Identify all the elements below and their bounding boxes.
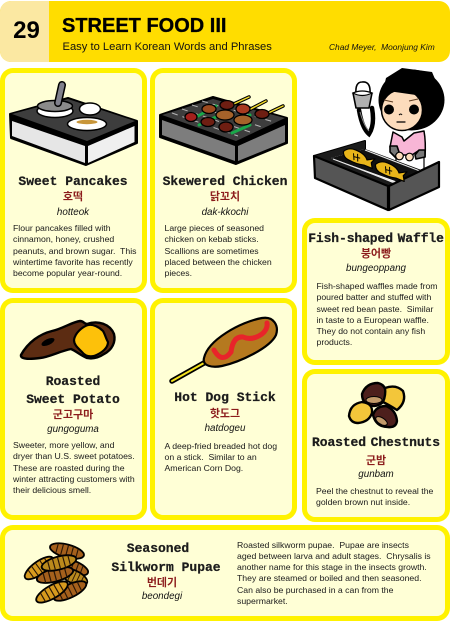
heading bbox=[26, 374, 120, 407]
description: Scallions are sometimes bbox=[164, 246, 259, 256]
heading: Roasted Chestnuts bbox=[312, 435, 440, 450]
description: become popular year-round. bbox=[13, 268, 122, 278]
description: on a stick. Similar to an bbox=[164, 452, 257, 462]
icon: griddle with pancakes bbox=[9, 81, 138, 166]
icon: corn dog bbox=[169, 316, 278, 384]
korean word: 군밤 bbox=[366, 455, 386, 467]
vendor figure bbox=[378, 68, 444, 172]
description: wintertime favorite has recently bbox=[13, 257, 133, 267]
panel: sweet pancakes bbox=[0, 68, 147, 293]
heading: Sweet Potato bbox=[26, 392, 120, 407]
korean word: 군고구마 bbox=[53, 409, 93, 421]
panel: fish-shaped waffle bbox=[302, 218, 450, 365]
description: Fish-shaped waffles made from bbox=[316, 281, 438, 291]
description: Peel the chestnut to reveal the bbox=[316, 486, 433, 496]
heading: Roasted bbox=[46, 374, 100, 389]
korean word: 핫도그 bbox=[210, 408, 240, 420]
description bbox=[13, 440, 135, 495]
romanization: dak-kkochi bbox=[202, 206, 248, 218]
icon: fish waffle right bbox=[373, 159, 408, 183]
waffle stand bbox=[314, 141, 439, 210]
icon: silkworm pupae pile bbox=[24, 542, 89, 604]
description bbox=[237, 540, 431, 606]
heading: Fish-shaped Waffle bbox=[308, 231, 444, 246]
description: their delicious smell. bbox=[13, 485, 91, 495]
description: A deep-fried breaded hot dog bbox=[164, 440, 277, 450]
description: aged between larva and adult stages. Chrysalis is bbox=[237, 551, 431, 561]
icon: hanging lamp bbox=[353, 82, 373, 134]
heading: Skewered Chicken bbox=[163, 174, 287, 189]
description: placed between the chicken bbox=[164, 257, 272, 267]
title: STREET FOOD III bbox=[62, 15, 226, 37]
icon: sweet potato bbox=[20, 320, 116, 360]
description: another name for this stage in the insects growth. bbox=[237, 562, 427, 572]
description bbox=[164, 440, 277, 473]
description: pieces. bbox=[164, 268, 192, 278]
romanization: hotteok bbox=[57, 206, 89, 218]
description: American Corn Dog. bbox=[164, 463, 243, 473]
description: poured batter and stuffed with bbox=[316, 292, 431, 302]
heading: Hot Dog Stick bbox=[174, 390, 276, 405]
description: winter attracting customers with bbox=[13, 474, 135, 484]
description: Sweeter, more yellow, and bbox=[13, 440, 114, 450]
panel: roasted chestnuts bbox=[302, 369, 450, 522]
description: peanuts, and brown sugar. This bbox=[13, 246, 136, 256]
panel: skewered chicken bbox=[150, 68, 297, 293]
romanization: gunbam bbox=[358, 469, 394, 480]
description bbox=[164, 223, 272, 278]
heading line 2: Silkworm Pupae bbox=[111, 560, 221, 574]
lesson number tab bbox=[0, 1, 49, 62]
description: in taste to a European waffle. bbox=[316, 315, 429, 325]
heading: Sweet Pancakes bbox=[18, 174, 128, 189]
description: chicken on kebab sticks. bbox=[164, 234, 259, 244]
subtitle: Easy to Learn Korean Words and Phrases bbox=[62, 41, 272, 53]
description: sweet red bean paste. Similar bbox=[316, 304, 433, 314]
korean word: 닭꼬치 bbox=[210, 191, 240, 203]
heading line 1: Seasoned bbox=[127, 541, 189, 556]
description: cinnamon, honey, crushed bbox=[13, 234, 114, 244]
description: These are roasted during the bbox=[13, 462, 125, 472]
description: Large pieces of seasoned bbox=[164, 223, 264, 233]
panel: seasoned silkworm pupae bbox=[0, 525, 450, 620]
panel: hot dog stick bbox=[150, 298, 297, 520]
icon: grill with skewers bbox=[159, 95, 288, 165]
romanization: beondegi bbox=[142, 591, 182, 602]
description: supermarket. bbox=[237, 596, 288, 606]
romanization: hatdogeu bbox=[205, 423, 245, 434]
korean word: 호떡 bbox=[63, 191, 83, 203]
panel: roasted sweet potato bbox=[0, 298, 147, 520]
description bbox=[316, 486, 433, 507]
icon: chestnuts bbox=[348, 382, 406, 428]
romanization: gungoguma bbox=[47, 424, 99, 435]
description: Flour pancakes filled with bbox=[13, 223, 111, 233]
romanization: bungeoppang bbox=[346, 263, 406, 274]
description bbox=[13, 223, 136, 278]
korean word: 붕어빵 bbox=[361, 248, 391, 260]
illustration: vendor at waffle stand bbox=[312, 68, 444, 212]
description bbox=[316, 281, 438, 347]
description: Can also be purchased in a can from the bbox=[237, 584, 393, 594]
header banner bbox=[0, 1, 450, 62]
lesson number tab: 29 bbox=[13, 17, 40, 44]
korean word: 번데기 bbox=[147, 576, 177, 588]
description: Roasted silkworm pupae. Pupae are insects bbox=[237, 540, 409, 550]
description: products. bbox=[316, 337, 352, 347]
description: They are steamed or boiled and then seasoned. bbox=[237, 573, 422, 583]
description: dryer than U.S. sweet potatoes. bbox=[13, 451, 135, 461]
description: They do not contain any fish bbox=[316, 326, 425, 336]
icon: fish waffle left bbox=[341, 146, 376, 170]
description: golden brown nut inside. bbox=[316, 497, 410, 507]
authors: Chad Meyer, Moonjung Kim bbox=[329, 42, 435, 52]
